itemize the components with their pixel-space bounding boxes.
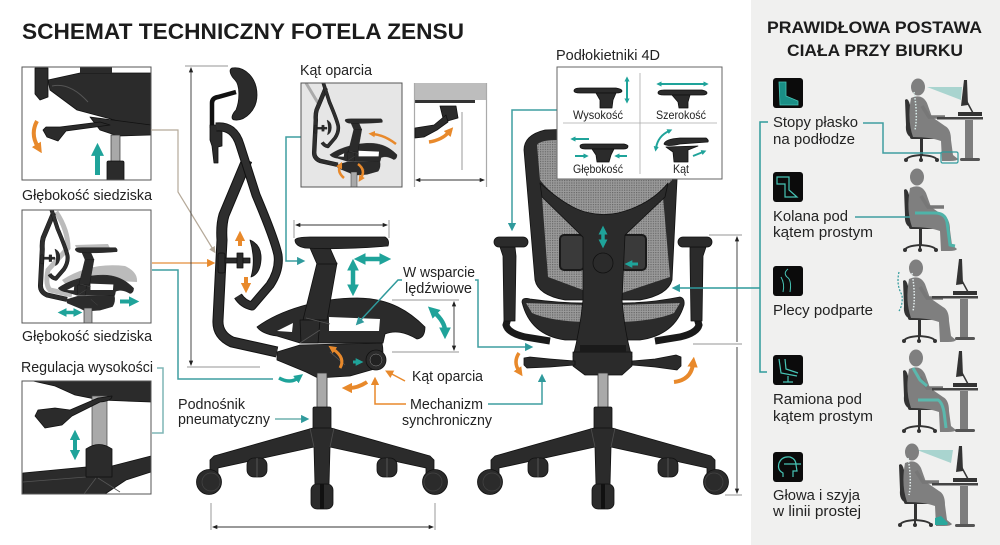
label: synchronous mechanism: synchroniczny [402, 412, 492, 429]
right armrest [655, 237, 712, 341]
figure: arms [902, 350, 978, 433]
left armrest [494, 237, 550, 341]
label: backrest angle heading: Kąt oparcia [300, 62, 373, 79]
connector: depth orange [152, 262, 212, 264]
label: height adjustment: Regulacja wysokości [21, 359, 153, 376]
arrow: orange tilt [34, 121, 38, 147]
icon: knee [773, 172, 803, 202]
label: seat depth upper: Głębokość siedziska [22, 187, 153, 204]
sub-panel: depth [573, 139, 628, 176]
sub-panel: width [656, 84, 707, 122]
right sidebar background [751, 0, 1000, 545]
item 5: head and neck: Głowa i szyja [773, 487, 861, 504]
item 4: arms: kątem prostym [773, 408, 873, 425]
sub-panel: height: Wysokość [573, 108, 623, 122]
sidebar heading: CIAŁA PRZY BIURKU [787, 41, 963, 60]
label: gas lift [178, 396, 270, 428]
pointer: backrest angle [388, 372, 405, 381]
item 1: feet flat: na podłodze [773, 131, 855, 148]
adjustment arrows: front chair [516, 232, 693, 382]
item 2: knees: Kolana pod [773, 208, 848, 225]
item 2: knees: kątem prostym [773, 224, 873, 241]
dimension: seat thickness [392, 300, 459, 352]
label: gas lift: Podnośnik [178, 396, 245, 413]
label: lumbar support: W wsparcie [403, 264, 475, 281]
dimension: front heights [693, 235, 742, 495]
item 4: arms: Ramiona pod [773, 391, 862, 408]
label: synchronous mechanism: Mechanizm [410, 396, 483, 413]
arrow: teal up [95, 152, 100, 175]
panel: tilt knob detail [414, 83, 486, 187]
label: 4D armrests heading: Podłokietniki 4D [556, 47, 660, 64]
item 5: head and neck: w linii prostej [772, 503, 861, 520]
pointer: gas lift [275, 418, 306, 420]
arrow: teal vertical double [73, 437, 77, 453]
panel: height adjustment detail [22, 381, 151, 494]
connector: lumbar pointer [358, 280, 402, 323]
icon: head [773, 452, 803, 482]
sub-panel: width: Szerokość [656, 108, 706, 122]
connector: height bracket [152, 368, 163, 433]
sidebar connector bracket [675, 122, 768, 372]
title: SCHEMAT TECHNICZNY FOTELA ZENSU [22, 19, 464, 44]
sub-panel: height [573, 80, 627, 122]
dimension: base width [211, 503, 435, 530]
sub-panel: angle [656, 131, 708, 176]
connector: seat lever to chair [151, 130, 214, 251]
label: lumbar support [403, 264, 475, 297]
panel: seat depth detail [22, 198, 151, 323]
icon: foot [773, 78, 803, 108]
sidebar heading: PRAWIDŁOWA POSTAWA [767, 18, 982, 37]
adjustment arrows: side chair [240, 238, 445, 388]
label: backrest angle: Kąt oparcia [412, 368, 484, 385]
icon: armchair [773, 355, 803, 385]
icon: spine [773, 266, 803, 296]
item 1: feet flat [773, 78, 983, 163]
label: lumbar support: lędźwiowe [405, 280, 472, 297]
connector: depth teal [152, 270, 273, 379]
sub-panel: angle: Kąt [673, 162, 690, 176]
headrest [212, 68, 257, 128]
connector: tilt panel to armrest [286, 137, 302, 261]
item 3: back supported: Plecy podparte [773, 302, 873, 319]
connector: 4D panel to armrest [512, 110, 557, 228]
item 3: back supported [773, 259, 978, 343]
item 2: knees [773, 168, 957, 252]
figure: seated with desk [863, 78, 983, 163]
panel: backrest angle detail [301, 75, 402, 187]
chair: side view [196, 68, 448, 509]
dimension: chair height [185, 66, 260, 367]
figure: head line of sight [898, 444, 978, 527]
connector: mechanism to front chair [488, 377, 542, 404]
item 1: feet flat: Stopy płasko [773, 114, 858, 131]
figure: seated knees [855, 168, 957, 252]
label: seat depth lower: Głębokość siedziska [22, 328, 153, 345]
label: gas lift: pneumatyczny [178, 411, 270, 428]
arrow: teal right [120, 300, 132, 304]
panel: seat height lever detail [22, 66, 151, 181]
panel: 4D armrests [557, 67, 722, 179]
connector: lumbar to front chair [475, 280, 530, 347]
figure: back support [898, 259, 978, 343]
arrow: teal double [64, 311, 76, 314]
dimension: armrest width [294, 220, 389, 238]
label: synchronous mechanism [402, 396, 492, 429]
item 4: arms [773, 350, 978, 433]
chair: front view [478, 128, 728, 509]
item 5: head and neck [772, 444, 978, 527]
sub-panel: depth: Głębokość [573, 162, 623, 176]
pointer: sync mechanism orange [375, 380, 406, 404]
sidebar heading [767, 18, 982, 60]
